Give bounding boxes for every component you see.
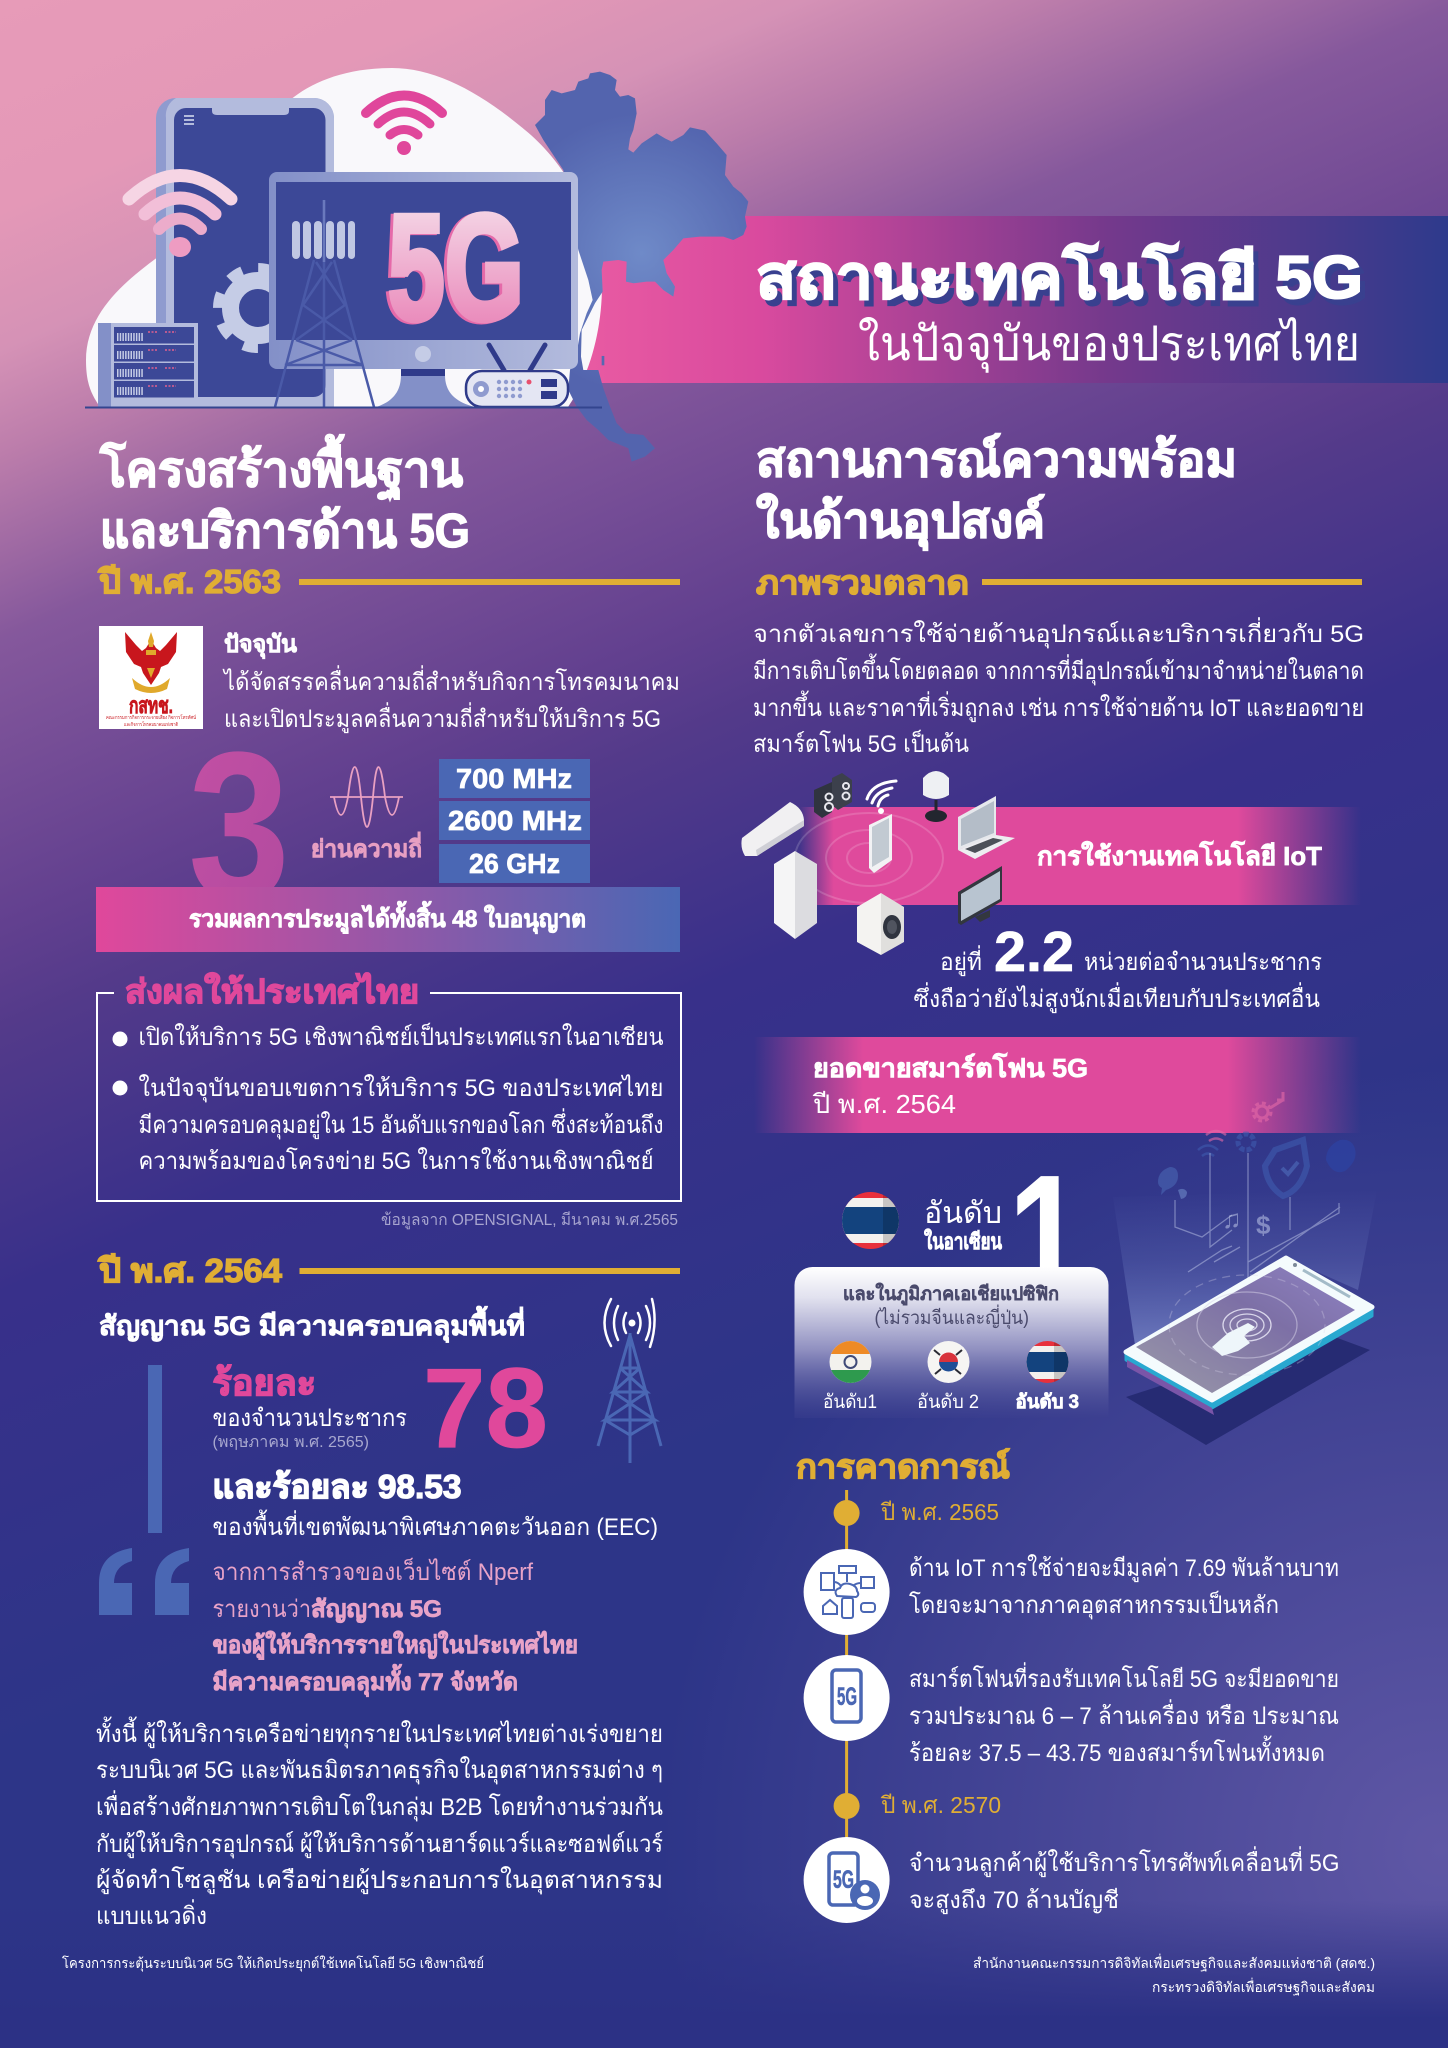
Nperf quote: มีความครอบคลุมทั้ง 77 จังหวัด bbox=[212, 1663, 518, 1698]
coverage stat 78: (พฤษภาคม พ.ศ. 2565) bbox=[212, 1434, 369, 1451]
panel: Asia Pacific ranking: อันดับ 2 bbox=[917, 1392, 979, 1413]
circuit lines bbox=[1175, 1153, 1340, 1290]
title: สถานะเทคโนโลยี 5G bbox=[761, 248, 1368, 317]
forecast smartphone text: ร้อยละ 37.5 – 43.75 ของสมาร์ทโฟนทั้งหมด bbox=[909, 1735, 1325, 1767]
panel: Asia Pacific ranking bbox=[794, 1267, 1108, 1418]
closing paragraph: ผู้จัดทำโซลูชัน เครือข่ายผู้ประกอบการในอุตสาหกรรม bbox=[96, 1866, 663, 1895]
title banner bbox=[580, 216, 1448, 383]
coverage stat 78 bbox=[212, 1345, 548, 1471]
year 2563 heading bbox=[98, 563, 680, 600]
Nperf quote: รายงานว่า bbox=[212, 1596, 311, 1623]
vertical accent bar bbox=[148, 1365, 162, 1533]
panel: Asia Pacific ranking: อันดับ 3 bbox=[1016, 1392, 1079, 1413]
market overview paragraph bbox=[753, 617, 1364, 758]
bullets bbox=[112, 1022, 664, 1175]
5G logotype: 5G bbox=[385, 184, 521, 352]
forecast IoT text: ด้าน IoT การใช้จ่ายจะมีมูลค่า 7.69 พันล้านบาท bbox=[909, 1554, 1339, 1583]
market overview paragraph: มากขึ้น และราคาที่เริ่มถูกลง เช่น การใช้จ่ายด้าน IoT และยอดขาย bbox=[753, 690, 1364, 723]
forecast smartphone text: สมาร์ตโฟนที่รองรับเทคโนโลยี 5G จะมียอดขาย bbox=[909, 1662, 1339, 1693]
title bbox=[756, 242, 1368, 373]
Nperf quote bbox=[212, 1557, 578, 1698]
logo: NBTC bbox=[99, 626, 203, 729]
spectrum allocation text: และเปิดประมูลคลื่นความถี่สำหรับให้บริการ 5G bbox=[224, 702, 661, 734]
thai flag bbox=[842, 1192, 899, 1249]
forecast IoT text: โดยจะมาจากภาคอุตสาหกรรมเป็นหลัก bbox=[909, 1590, 1279, 1620]
icon: gear bbox=[218, 268, 298, 348]
rank first in ASEAN bbox=[842, 1176, 1059, 1267]
IoT devices bbox=[741, 771, 1015, 955]
title: ในปัจจุบันของประเทศไทย bbox=[858, 316, 1360, 373]
IoT stat: อยู่ที่ bbox=[940, 945, 982, 977]
market overview heading bbox=[756, 564, 1362, 601]
floating icons bbox=[1158, 1092, 1356, 1199]
left heading: โครงสร้างพื้นฐาน bbox=[99, 434, 463, 501]
market overview paragraph: จากตัวเลขการใช้จ่ายด้านอุปกรณ์และบริการเกี่ยวกับ 5G bbox=[753, 617, 1364, 649]
phone bbox=[869, 814, 892, 873]
panel: Asia Pacific ranking: และในภูมิภาคเอเชียแปซิฟิก bbox=[843, 1282, 1059, 1306]
logo: NBTC: คณะกรรมการกิจการกระจายเสียง กิจการโทรทัศน์ bbox=[106, 714, 196, 721]
icon: 5G subscriber bbox=[804, 1837, 890, 1923]
thailand map bbox=[535, 72, 748, 462]
panel: smartphone sales band bbox=[754, 1037, 1361, 1133]
spectrum allocation text: ปัจจุบัน bbox=[224, 631, 298, 660]
right heading bbox=[756, 433, 1237, 551]
IoT stat bbox=[914, 920, 1322, 1014]
router bbox=[466, 345, 568, 407]
icon: pink wifi bbox=[366, 96, 442, 155]
phone body bbox=[1126, 1307, 1372, 1408]
forecast subscriber text bbox=[909, 1846, 1340, 1915]
icon: quote mark bbox=[99, 1548, 189, 1615]
flag: Thailand bbox=[1026, 1340, 1070, 1384]
Nperf quote: จากการสำรวจของเว็บไซต์ Nperf bbox=[212, 1557, 533, 1586]
light beam bbox=[1113, 1190, 1377, 1345]
washer bbox=[857, 893, 904, 955]
white blob bbox=[86, 68, 602, 407]
total licences bar bbox=[96, 887, 680, 952]
frequency boxes: 26 GHz bbox=[469, 848, 560, 879]
icon: signal tower bbox=[598, 1299, 661, 1463]
icon: 5G phone: 5G bbox=[837, 1683, 857, 1711]
frequency band label: ย่านความถี่ bbox=[311, 831, 422, 863]
forecast smartphone text: รวมประมาณ 6 – 7 ล้านเครื่อง หรือ ประมาณ bbox=[909, 1699, 1339, 1730]
Nperf quote: ของผู้ให้บริการรายใหญ่ในประเทศไทย bbox=[212, 1630, 578, 1660]
rank first in ASEAN: อันดับ bbox=[924, 1197, 1002, 1230]
tv bbox=[958, 866, 1002, 925]
panel: Asia Pacific ranking: (ไม่รวมจีนและญี่ปุ่น) bbox=[874, 1304, 1029, 1330]
air conditioner bbox=[741, 802, 804, 856]
music and dollar marks: ♫ bbox=[1222, 1204, 1242, 1234]
rank first in ASEAN: 1 bbox=[1008, 1138, 1084, 1339]
wifi bbox=[867, 781, 896, 812]
flag: India bbox=[829, 1340, 873, 1384]
bullets: เปิดให้บริการ 5G เชิงพาณิชย์เป็นประเทศแรกในอาเซียน bbox=[138, 1022, 664, 1051]
closing paragraph: แบบแนวดิ่ง bbox=[96, 1899, 207, 1930]
coverage stat 78: ของจำนวนประชากร bbox=[212, 1405, 407, 1432]
closing paragraph: ทั้งนี้ ผู้ให้บริการเครือข่ายทุกรายในประเทศไทยต่างเร่งขยาย bbox=[96, 1716, 663, 1749]
market overview heading: ภาพรวมตลาด bbox=[756, 564, 969, 601]
heading: การใช้งานเทคโนโลยี IoT bbox=[1037, 840, 1322, 871]
logo: NBTC: และกิจการโทรคมนาคมแห่งชาติ bbox=[124, 721, 178, 728]
icon: wave bbox=[330, 767, 403, 827]
smartphone bbox=[156, 98, 334, 407]
lamp bbox=[923, 771, 949, 822]
market overview paragraph: มีการเติบโตขึ้นโดยตลอด จากการที่มีอุปกรณ์เข้ามาจำหน่ายในตลาด bbox=[753, 653, 1364, 686]
touch rings bbox=[1169, 1275, 1325, 1375]
speakers bbox=[814, 773, 852, 818]
milestone 2565 bbox=[834, 1499, 999, 1526]
panel: impact on Thailand bbox=[97, 972, 681, 1201]
frequency boxes: 700 MHz bbox=[456, 763, 572, 794]
coverage heading: สัญญาณ 5G มีความครอบคลุมพื้นที่ bbox=[99, 1305, 525, 1343]
laptop bbox=[958, 796, 1015, 859]
hero illustration bbox=[85, 68, 748, 462]
spectrum allocation text: ได้จัดสรรคลื่นความถี่สำหรับกิจการโทรคมนาคม bbox=[222, 665, 680, 696]
panel: smartphone sales band: ยอดขายสมาร์ตโฟน 5G bbox=[813, 1052, 1088, 1083]
year 2563 heading: ปี พ.ศ. 2563 bbox=[98, 563, 281, 600]
left heading bbox=[99, 434, 470, 558]
source note: ข้อมูลจาก OPENSIGNAL, มีนาคม พ.ศ.2565 bbox=[381, 1211, 678, 1230]
coverage stat 78: 78 bbox=[423, 1345, 548, 1471]
panel: Asia Pacific ranking: อันดับ1 bbox=[823, 1392, 877, 1413]
panel: smartphone sales band: ปี พ.ศ. 2564 bbox=[812, 1089, 956, 1119]
footer left: โครงการกระตุ้นระบบนิเวศ 5G ให้เกิดประยุกต์ใช้เทคโนโลยี 5G เชิงพาณิชย์ bbox=[62, 1955, 484, 1972]
total licences bar: รวมผลการประมูลได้ทั้งสิ้น 48 ใบอนุญาต bbox=[189, 900, 586, 935]
closing paragraph: เพื่อสร้างศักยภาพการเติบโตในกลุ่ม B2B โดยทำงานร่วมกัน bbox=[96, 1790, 663, 1822]
bullets: ในปัจจุบันขอบเขตการให้บริการ 5G ของประเทศไทย bbox=[138, 1074, 664, 1103]
milestone 2570 bbox=[834, 1792, 1001, 1819]
music and dollar marks: $ bbox=[1256, 1210, 1271, 1240]
year 2564 heading bbox=[98, 1252, 680, 1289]
forecast subscriber text: จำนวนลูกค้าผู้ใช้บริการโทรศัพท์เคลื่อนที่ 5G bbox=[909, 1846, 1340, 1878]
closing paragraph: ระบบนิเวศ 5G และพันธมิตรภาคธุรกิจในอุตสาหกรรมต่าง ๆ bbox=[96, 1756, 663, 1785]
icon: pale wifi bbox=[129, 176, 231, 257]
year 2564 heading: ปี พ.ศ. 2564 bbox=[98, 1252, 283, 1289]
frequency boxes: 2600 MHz bbox=[448, 805, 582, 836]
IoT stat: หน่วยต่อจำนวนประชากร bbox=[1084, 949, 1322, 976]
bullets: ความพร้อมของโครงข่าย 5G ในการใช้งานเชิงพาณิชย์ bbox=[138, 1147, 654, 1175]
Nperf quote: สัญญาณ 5G bbox=[311, 1596, 442, 1623]
EEC stat: ของพื้นที่เขตพัฒนาพิเศษภาคตะวันออก (EEC) bbox=[212, 1509, 658, 1541]
EEC stat bbox=[212, 1468, 658, 1541]
EEC stat: และร้อยละ 98.53 bbox=[212, 1468, 462, 1505]
server rack bbox=[98, 323, 198, 407]
big number 3: 3 bbox=[188, 708, 290, 943]
forecast smartphone text bbox=[909, 1662, 1339, 1767]
right heading: ในด้านอุปสงค์ bbox=[756, 492, 1045, 551]
left heading: และบริการด้าน 5G bbox=[100, 505, 470, 558]
spectrum allocation text bbox=[222, 631, 680, 734]
milestone 2565: ปี พ.ศ. 2565 bbox=[880, 1499, 999, 1525]
closing paragraph: กับผู้ให้บริการอุปกรณ์ ผู้ให้บริการด้านฮาร์ดแวร์และซอฟต์แวร์ bbox=[96, 1830, 663, 1859]
panel: IoT band bbox=[795, 807, 1361, 905]
icon: IoT network bbox=[804, 1549, 890, 1635]
frequency boxes bbox=[439, 759, 590, 883]
isometric smartphone illustration bbox=[1113, 1092, 1377, 1445]
coverage stat 78: ร้อยละ bbox=[212, 1362, 316, 1403]
5G logotype: 5G bbox=[388, 183, 524, 351]
music and dollar marks bbox=[1222, 1204, 1271, 1240]
icon: 5G phone bbox=[804, 1655, 890, 1741]
tower bbox=[275, 200, 374, 407]
title: สถานะเทคโนโลยี 5G bbox=[756, 242, 1363, 311]
forecast heading: การคาดการณ์ bbox=[796, 1448, 1010, 1485]
milestone 2570: ปี พ.ศ. 2570 bbox=[880, 1792, 1001, 1818]
IoT stat: 2.2 bbox=[994, 920, 1074, 984]
logo: NBTC: กสทช. bbox=[129, 693, 173, 718]
footer right: สำนักงานคณะกรรมการดิจิทัลเพื่อเศรษฐกิจและสังคมแห่งชาติ (สดช.) bbox=[973, 1954, 1375, 1972]
forecast IoT text bbox=[909, 1554, 1339, 1620]
rank first in ASEAN: ในอาเซียน bbox=[924, 1228, 1002, 1254]
bullets: มีความครอบคลุมอยู่ใน 15 อันดับแรกของโลก ซึ่งสะท้อนถึง bbox=[138, 1108, 664, 1140]
hand bbox=[1212, 1323, 1255, 1356]
market overview paragraph: สมาร์ตโฟน 5G เป็นต้น bbox=[753, 729, 969, 758]
flag: Korea bbox=[928, 1341, 970, 1383]
heading: ส่งผลให้ประเทศไทย bbox=[125, 972, 419, 1010]
footer right bbox=[973, 1954, 1375, 1996]
closing paragraph bbox=[96, 1716, 663, 1930]
5G logotype bbox=[385, 183, 524, 352]
fridge bbox=[774, 851, 817, 939]
forecast timeline bbox=[804, 1490, 1340, 1923]
right heading: สถานการณ์ความพร้อม bbox=[756, 433, 1237, 487]
shadow bbox=[1126, 1333, 1370, 1445]
forecast subscriber text: จะสูงถึง 70 ล้านบัญชี bbox=[909, 1887, 1119, 1915]
footer right: กระทรวงดิจิทัลเพื่อเศรษฐกิจและสังคม bbox=[1152, 1978, 1375, 1996]
icon: 5G subscriber: 5G bbox=[833, 1866, 854, 1894]
monitor bbox=[269, 172, 578, 407]
IoT stat: ซึ่งถือว่ายังไม่สูงนักเมื่อเทียบกับประเทศอื่น bbox=[914, 982, 1320, 1014]
